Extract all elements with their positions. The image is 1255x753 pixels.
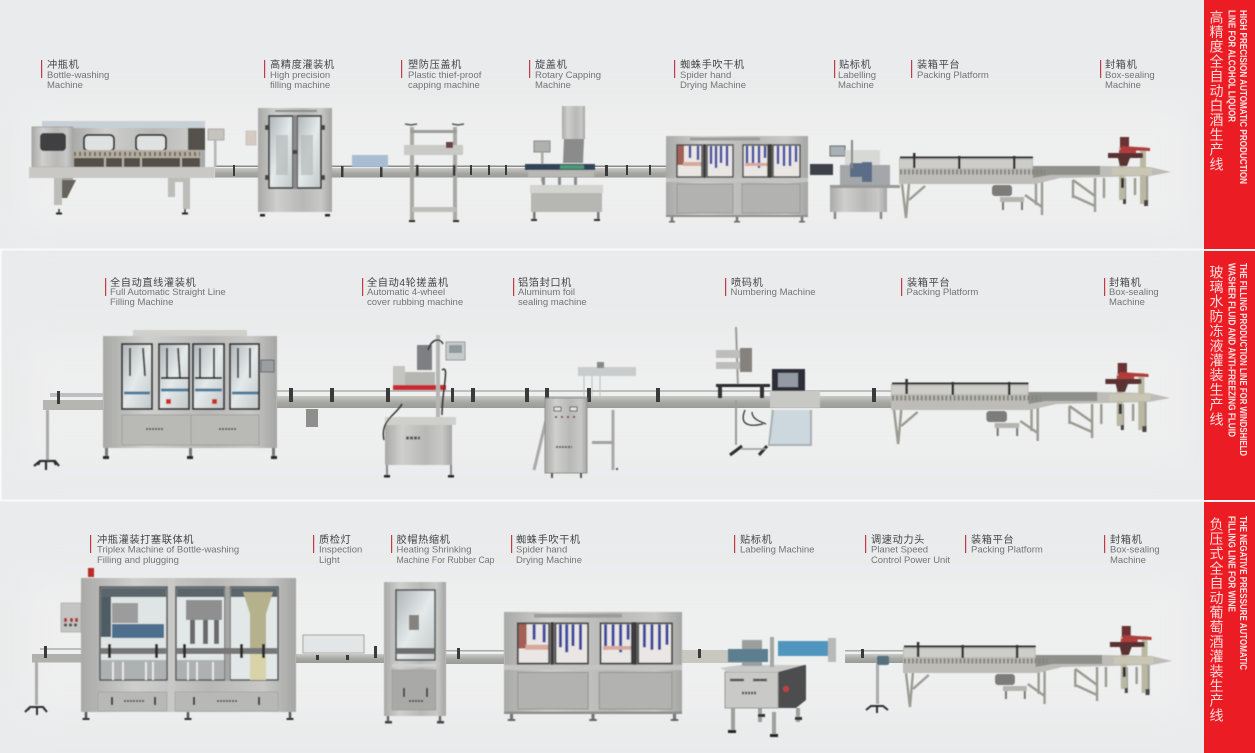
label: spider hand drying <box>674 58 746 91</box>
sidebar: line 3 title: FILLING LINE FOR WINE <box>1226 516 1238 612</box>
label: packing platform: 装箱平台 <box>907 276 950 289</box>
machine: rubber cap heating shrink <box>384 582 446 724</box>
label: box sealing <box>1104 533 1160 566</box>
machine: spider hand dryer <box>504 612 682 721</box>
label: power unit: Control Power Unit <box>871 555 950 566</box>
label: aluminum foil sealing: 铝箔封口机 <box>518 276 572 289</box>
label: rotary capping <box>529 58 601 91</box>
label: straight line filling: Full Automatic Straight Line <box>110 287 226 298</box>
sidebar: line 2 title: THE FILLING PRODUCTION LINE FOR WINDSHIELD <box>1237 263 1249 456</box>
panel: windshield washer fluid and antifreeze line <box>25 276 1190 478</box>
machine: rotary capper <box>525 106 603 221</box>
machine: plastic thief-proof capper <box>404 124 464 222</box>
label: spider hand drying: 蜘蛛手吹干机 <box>516 533 581 546</box>
label: inspection light: 质检灯 <box>319 533 351 546</box>
divider: panel 2 frame <box>0 250 1255 500</box>
label: box sealing: Box-sealing <box>1110 544 1160 556</box>
label: aluminum foil sealing: sealing machine <box>518 297 587 308</box>
machine: numbering machine <box>716 327 820 455</box>
machine: aluminum foil sealer <box>534 362 636 478</box>
label: heating shrinking: Machine For Rubber Cap <box>396 555 494 566</box>
sidebar: line 1 title: HIGH PRECISION AUTOMATIC PRODUCTION <box>1237 10 1249 184</box>
machine: spider hand dryer <box>666 136 808 222</box>
label: inspection light: Inspection <box>319 544 362 556</box>
label: 4-wheel cover rubbing <box>362 276 463 308</box>
label: box sealing: Machine <box>1110 555 1146 566</box>
label: box sealing: 封箱机 <box>1109 276 1141 289</box>
label: aluminum foil sealing: Aluminum foil <box>518 287 575 298</box>
label: box sealing: 封箱机 <box>1110 533 1142 546</box>
sidebar: line 1 title: LINE FOR ALCOHOL LIQUOR <box>1226 10 1238 122</box>
label: triplex: Filling and plugging <box>97 555 179 566</box>
label: 4-wheel cover rubbing: Automatic 4-wheel <box>367 287 445 298</box>
sidebar: line 2 title <box>1204 251 1255 500</box>
label: inspection light: Light <box>319 555 340 566</box>
machine: 4-wheel cover rubbing machine <box>383 335 465 478</box>
label: spider hand drying <box>511 533 582 566</box>
machine: feed stand <box>34 410 59 470</box>
label: box sealing: Box-sealing <box>1105 70 1155 81</box>
label: numbering: 喷码机 <box>731 276 763 289</box>
label: box sealing: Box-sealing <box>1109 287 1159 298</box>
label: capping machine: capping machine <box>408 80 480 91</box>
machine: inspection light <box>303 635 364 653</box>
label: spider hand drying: Spider hand <box>516 544 567 556</box>
machine: high precision filler <box>246 108 388 216</box>
label: bottle washing: Bottle-washing <box>47 70 109 81</box>
label: packing platform <box>901 276 978 298</box>
label: spider hand drying: Spider hand <box>680 70 731 81</box>
sidebar: line 1 title <box>1204 0 1255 249</box>
label: filling machine <box>264 58 335 91</box>
machine: packing platform and box sealer <box>899 137 1171 218</box>
machine: packing platform and box sealer <box>903 626 1172 707</box>
label: box sealing <box>1100 58 1155 91</box>
label: packing platform: 装箱平台 <box>917 58 960 71</box>
label: labelling: Labelling <box>838 70 876 81</box>
label: heating shrinking: 胶帽热缩机 <box>396 533 450 546</box>
label: aluminum foil sealing <box>513 276 587 308</box>
label: packing platform <box>965 533 1043 556</box>
sidebar: line 2 title: WASHER FLUID AND ANTI-FREEZING FLUID <box>1226 263 1238 437</box>
machine: triplex bottle washing filling plugging <box>61 568 296 720</box>
label: bottle washing: Machine <box>47 80 83 91</box>
label: capping machine: Plastic thief-proof <box>408 70 482 81</box>
panel: high precision alcohol liquor line <box>20 58 1190 230</box>
machine: labelling machine <box>810 140 900 219</box>
label: packing platform: Packing Platform <box>917 70 989 81</box>
machine: planet speed control power unit <box>866 656 889 713</box>
machine: packing platform and box sealer <box>891 363 1170 444</box>
conveyor line 2 <box>43 388 893 427</box>
sidebar: line 3 title <box>1204 502 1255 753</box>
sidebar: line 3 title: 负压式全自动葡萄酒灌装生产线 <box>1208 517 1224 723</box>
label: heating shrinking <box>391 533 494 566</box>
label: labeling <box>734 533 814 556</box>
label: inspection light <box>313 533 362 566</box>
label: box sealing: Machine <box>1105 80 1141 91</box>
label: capping machine: 塑防压盖机 <box>408 58 462 71</box>
label: filling machine: 高精度灌装机 <box>270 58 335 71</box>
label: packing platform: Packing Platform <box>906 287 978 298</box>
label: triplex <box>90 533 239 566</box>
label: rotary capping: Rotary Capping <box>535 70 601 81</box>
panel: negative pressure wine filling line <box>25 533 1190 737</box>
label: power unit <box>865 533 950 566</box>
label: straight line filling: 全自动直线灌装机 <box>110 276 196 289</box>
label: spider hand drying: Drying Machine <box>680 80 746 91</box>
label: box sealing <box>1104 276 1159 308</box>
label: labeling: Labeling Machine <box>740 544 814 556</box>
machine: straight line filler <box>103 330 277 459</box>
conveyor line 3 <box>32 646 905 664</box>
label: capping machine <box>401 58 482 91</box>
label: power unit: Planet Speed <box>871 544 928 556</box>
label: spider hand drying: 蜘蛛手吹干机 <box>680 58 745 71</box>
label: box sealing: 封箱机 <box>1105 58 1137 71</box>
label: packing platform: Packing Platform <box>971 544 1043 556</box>
label: rotary capping: Machine <box>535 80 571 91</box>
label: filling machine: filling machine <box>270 80 330 91</box>
label: 4-wheel cover rubbing: cover rubbing machine <box>367 297 463 308</box>
label: power unit: 调速动力头 <box>871 533 925 546</box>
label: heating shrinking: Heating Shrinking <box>396 544 472 556</box>
label: packing platform: 装箱平台 <box>971 533 1014 546</box>
label: labelling <box>834 58 876 91</box>
label: bottle washing <box>41 58 109 91</box>
label: labelling: Machine <box>838 80 874 91</box>
label: labelling: 贴标机 <box>839 58 871 71</box>
label: packing platform <box>911 58 989 81</box>
label: triplex: 冲瓶灌装打塞联体机 <box>97 533 194 546</box>
label: rotary capping: 旋盖机 <box>535 58 567 71</box>
label: straight line filling <box>105 276 226 308</box>
label: spider hand drying: Drying Machine <box>516 555 582 566</box>
sidebar: line 3 title: THE NEGATIVE PRESSURE AUTOMATIC <box>1237 516 1249 670</box>
sidebar: line 2 title: 玻璃水防冻液灌装生产线 <box>1208 265 1224 427</box>
conveyor line 1 <box>215 165 668 178</box>
label: bottle washing: 冲瓶机 <box>47 58 79 71</box>
label: numbering: Numbering Machine <box>730 287 816 298</box>
label: box sealing: Machine <box>1109 297 1145 308</box>
label: straight line filling: Filling Machine <box>110 297 173 308</box>
label: numbering <box>725 276 816 298</box>
label: filling machine: High precision <box>270 70 330 81</box>
sidebar: line 1 title: 高精度全自动白酒生产线 <box>1208 9 1224 172</box>
label: 4-wheel cover rubbing: 全自动4轮搓盖机 <box>367 276 449 289</box>
machine: feed stand <box>25 662 47 715</box>
machine: labeling machine <box>720 637 836 737</box>
label: triplex: Triplex Machine of Bottle-washing <box>97 544 239 556</box>
machine: bottle washer <box>29 121 224 214</box>
label: labeling: 贴标机 <box>740 533 772 546</box>
